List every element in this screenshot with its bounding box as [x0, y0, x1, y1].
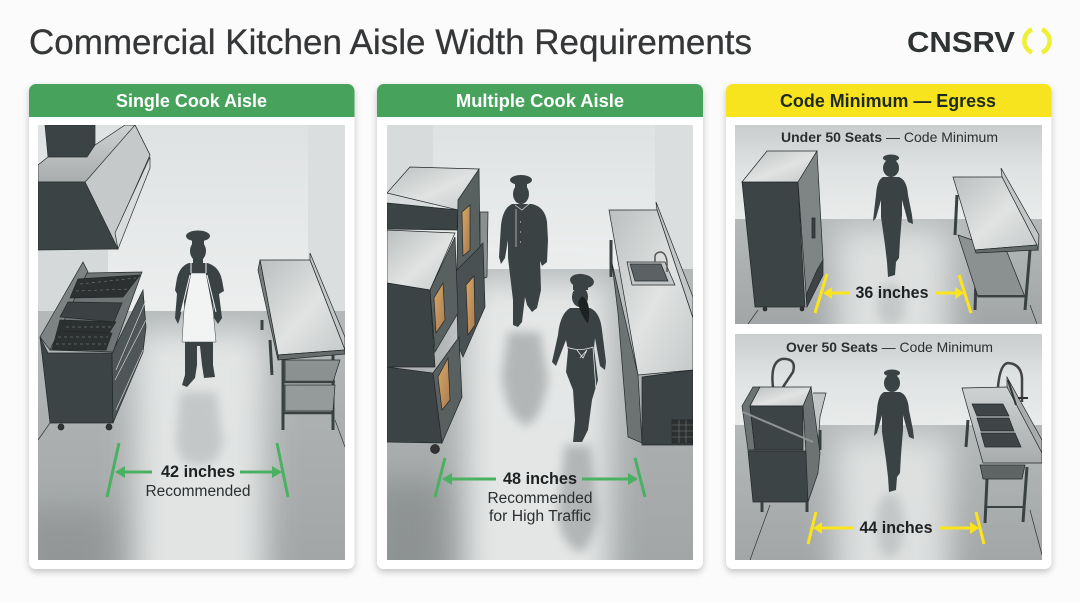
heading: single cook aisle: Single Cook Aisle [116, 91, 267, 111]
equipment: stacked ovens back [387, 167, 488, 357]
heading: code minimum egress [726, 84, 1052, 117]
dimension: 48 inches: Recommended [488, 490, 592, 507]
dimension: 36 inches [815, 274, 971, 313]
equipment: refrigerator [742, 151, 823, 311]
equipment: prep table [953, 168, 1039, 310]
equipment: stacked ovens front [387, 230, 462, 454]
figure: worker [874, 370, 914, 492]
dimension: 48 inches [435, 458, 645, 525]
reflection: worker [877, 283, 905, 327]
dimension: 42 inches: 42 inches [161, 462, 235, 481]
panel: code minimum egress [726, 84, 1052, 603]
illustration: single cook kitchen [38, 125, 345, 560]
caption: over 50 seats: Over 50 Seats — Code Minimum [786, 339, 993, 355]
title: Commercial Kitchen Aisle Width Requirements [29, 23, 752, 62]
heading: multiple cook aisle: Multiple Cook Aisle [456, 91, 624, 111]
reflection: chef [176, 392, 223, 465]
dimension: 42 inches [107, 443, 288, 500]
dimension: 48 inches: 48 inches [503, 469, 577, 488]
equipment: counter with sink [609, 202, 693, 445]
dimension: 44 inches [808, 512, 984, 544]
equipment: three-compartment sink [962, 363, 1042, 523]
reflection: worker [876, 493, 904, 557]
dimension: 44 inches: 44 inches [860, 518, 932, 537]
panel: multiple cook aisle [370, 84, 703, 603]
reflection: chefs [502, 332, 598, 552]
figure: chef in jacket [499, 175, 548, 327]
dimension: 42 inches: Recommended [146, 483, 250, 500]
illustration: under 50 seats [735, 125, 1042, 324]
dimension: 36 inches: 36 inches [856, 283, 928, 302]
figure: worker [873, 154, 913, 277]
heading: code minimum egress: Code Minimum — Egress [780, 91, 996, 111]
equipment: range [40, 262, 146, 430]
equipment: prep table [258, 253, 345, 430]
heading: multiple cook aisle [377, 84, 703, 117]
equipment: dish machine [742, 359, 826, 512]
caption: under 50 seats: Under 50 Seats — Code Minimum [781, 129, 998, 145]
icon: yellow ring [1024, 30, 1050, 52]
figure: chef with apron [175, 230, 224, 387]
panel: single cook aisle [20, 84, 354, 603]
equipment: exhaust hood [38, 125, 150, 250]
illustration: over 50 seats [735, 334, 1042, 560]
logo: CNSRV: CNSRV [907, 27, 1016, 59]
figure: chef with ponytail [552, 272, 606, 442]
illustration: multiple cook kitchen [387, 125, 693, 560]
dimension: 48 inches: for High Traffic [489, 508, 591, 525]
heading: single cook aisle [29, 84, 354, 117]
